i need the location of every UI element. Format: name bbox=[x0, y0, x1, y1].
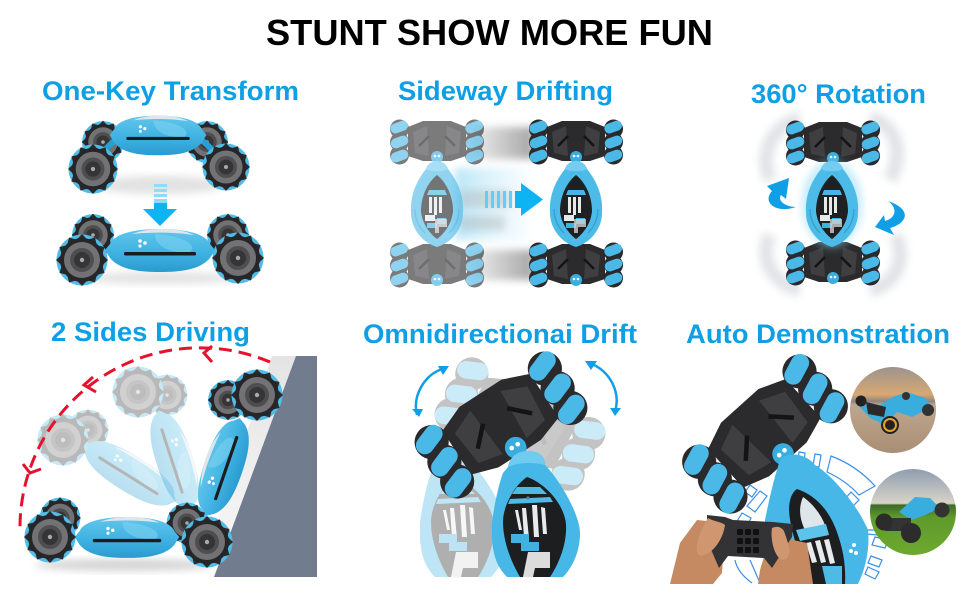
curved arrow left bbox=[412, 366, 449, 417]
panel: sideway drifting bbox=[389, 76, 624, 288]
heading: one-key transform: One-Key Transform bbox=[42, 76, 299, 106]
car raised bbox=[68, 116, 250, 194]
ghost car bbox=[389, 119, 485, 288]
red dashed path bbox=[20, 346, 270, 530]
curved arrow left bbox=[767, 178, 796, 209]
ramp bbox=[214, 356, 317, 577]
solid car bbox=[528, 119, 624, 288]
body bbox=[765, 455, 868, 584]
ramp highlight bbox=[205, 356, 296, 560]
curved arrow right bbox=[875, 201, 905, 235]
main body bbox=[492, 451, 580, 577]
arrow right bbox=[485, 183, 543, 216]
panel: auto demonstration bbox=[670, 319, 956, 584]
heading: 360 rotation: 360° Rotation bbox=[751, 79, 926, 109]
car on ground bbox=[24, 497, 233, 571]
heading: 2 sides driving: 2 Sides Driving bbox=[51, 317, 250, 347]
panel: omnidirectional drift bbox=[363, 319, 637, 577]
photo: street bbox=[850, 367, 936, 453]
axle bbox=[673, 346, 856, 522]
panel: one-key transform bbox=[42, 76, 299, 286]
heading: auto demonstration: Auto Demonstration bbox=[686, 319, 950, 349]
panel: 2 sides driving bbox=[20, 317, 317, 577]
ghost position 1 bbox=[37, 409, 185, 517]
title: STUNT SHOW MORE FUN bbox=[266, 12, 713, 53]
hands and remote bbox=[670, 515, 813, 584]
car lowered bbox=[56, 214, 264, 286]
rotating car bbox=[785, 120, 881, 286]
ghost body bbox=[420, 451, 508, 577]
panel: 360 rotation bbox=[751, 79, 926, 290]
curved arrow right bbox=[585, 361, 621, 416]
photo: grass bbox=[870, 469, 956, 555]
heading: omnidirectional drift: Omnidirectionai Drift bbox=[363, 319, 637, 349]
spin blur bbox=[766, 118, 900, 290]
arrow down bbox=[143, 184, 177, 226]
car on wall bbox=[188, 369, 283, 522]
main axle bbox=[406, 344, 595, 506]
motion blur bbox=[455, 127, 534, 280]
ghost axle bbox=[427, 350, 612, 497]
ghost position 2 bbox=[112, 366, 208, 515]
signal arcs bbox=[735, 452, 888, 583]
heading: sideway drifting: Sideway Drifting bbox=[398, 76, 613, 106]
